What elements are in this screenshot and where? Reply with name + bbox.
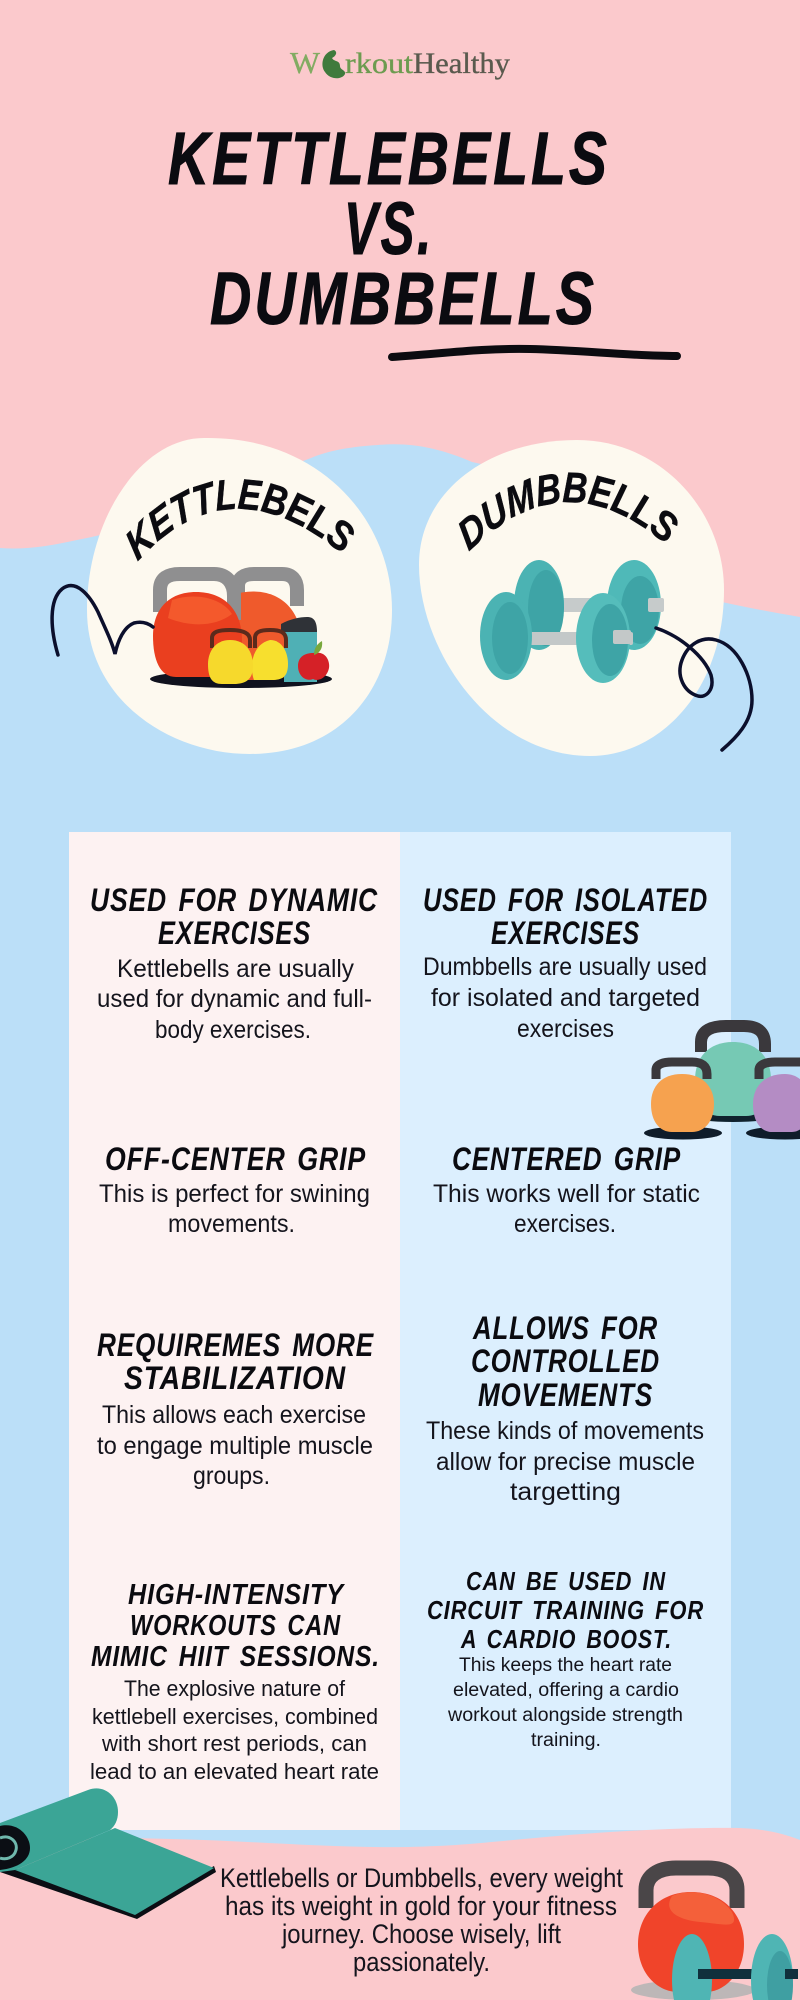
heading: EXERCISES [491,915,640,951]
squiggle: right [656,628,752,750]
body text [447,1655,683,1751]
body text: allow for precise muscle [436,1448,695,1476]
body text [426,1417,704,1506]
body text [97,955,372,1044]
curved label: KETTLEBELS [126,479,354,562]
body text: This is perfect for swining [99,1180,370,1208]
heading: CAN BE USED IN [466,1566,666,1596]
icon: rolled yoga mat [0,1788,216,1919]
logo: Healthy [413,47,510,80]
logo: W [290,45,321,80]
heading: CONTROLLED [471,1343,660,1379]
heading [423,882,708,951]
back dumbbell [543,598,663,612]
heading: USED FOR ISOLATED [423,882,708,918]
curved label: DUMBBELLS [458,472,678,552]
body text: targetting [510,1478,621,1506]
kettlebells point 3 [97,1327,375,1490]
heading: CENTERED GRIP [452,1141,681,1177]
closing message: Kettlebells or Dumbbells, every weight [220,1863,623,1893]
background: top pink wave [0,0,800,617]
body text: used for dynamic and full- [97,985,372,1013]
closing message: passionately. [353,1947,490,1977]
body text: exercises. [514,1210,616,1238]
panel: kettlebells column [69,832,400,1830]
title: VS. [344,187,434,270]
apple [298,653,329,680]
squiggle: left [52,586,153,655]
panel: dumbbells column [400,832,731,1830]
kettlebells point 2 [99,1141,370,1238]
front dumbbell [511,632,633,645]
body text: with short rest periods, can [101,1731,367,1756]
closing message: has its weight in gold for your fitness [225,1891,617,1921]
body text: This works well for static [433,1180,700,1208]
dumbbells point 4 [427,1566,704,1751]
dumbbells point 2 [433,1141,700,1238]
heading: EXERCISES [158,915,311,951]
body text: kettlebell exercises, combined [92,1704,378,1729]
body text: groups. [193,1462,270,1490]
body text: workout alongside strength [447,1705,683,1726]
closing message [220,1863,623,1977]
icon: dumbbell pair [480,560,664,683]
title: KETTLEBELLS [168,117,610,200]
heading: MOVEMENTS [478,1377,653,1413]
logo [290,45,510,80]
heading [97,1327,375,1396]
body text: for isolated and targeted [431,984,700,1012]
panel: kettlebells badge [87,438,392,754]
heading: REQUIREMES MORE [97,1327,375,1363]
body text: training. [531,1730,601,1751]
dumbbells point 1 [423,882,708,1043]
title [168,117,610,340]
body text [90,1676,379,1784]
purple kettlebell [746,1062,800,1140]
title underline [392,349,677,357]
heading: USED FOR DYNAMIC [90,882,378,918]
heading: OFF-CENTER GRIP [105,1141,366,1177]
heading: A CARDIO BOOST. [460,1624,672,1654]
heading: ALLOWS FOR [472,1310,658,1346]
kettlebells point 4 [90,1579,380,1784]
body text: to engage multiple muscle [97,1432,373,1460]
badge blob [87,438,392,754]
badge blob [419,440,724,756]
heading: MIMIC HIIT SESSIONS. [91,1641,380,1673]
body text: body exercises. [155,1016,311,1044]
body text [97,1401,373,1490]
title: DUMBBELLS [210,257,597,340]
closing message: journey. Choose wisely, lift [281,1919,561,1949]
kettlebells point 1 [90,882,378,1044]
body text: The explosive nature of [124,1676,346,1701]
body text [423,953,707,1043]
heading: WORKOUTS CAN [130,1610,341,1642]
icon: kettlebell group [150,574,332,688]
body text: exercises [517,1015,614,1043]
panel: dumbbells badge [419,440,724,756]
dumbbells point 3 [426,1310,704,1506]
shaker bottle [284,630,317,682]
body text: These kinds of movements [426,1417,704,1445]
yellow kettlebells [255,630,286,648]
heading: STABILIZATION [124,1360,346,1396]
heading [90,882,378,951]
logo: rkout [345,47,414,80]
heading [427,1566,704,1654]
heading: HIGH-INTENSITY [128,1579,345,1611]
teal kettlebell [693,1026,773,1122]
body text [433,1180,700,1238]
body text: Dumbbells are usually used [423,953,707,981]
icon: logo leaf [322,50,345,78]
background: bottom pink wave [0,1828,800,2000]
body text: This allows each exercise [102,1401,366,1429]
body text: This keeps the heart rate [459,1655,672,1676]
body text: elevated, offering a cardio [453,1680,679,1701]
heading [91,1579,380,1673]
orange kettlebell [644,1062,722,1140]
heading [471,1310,660,1413]
icon: kettlebell and dumbbell [631,1868,798,2000]
body text: lead to an elevated heart rate [90,1759,379,1784]
body text: movements. [168,1210,295,1238]
body text [99,1180,370,1238]
body text: Kettlebells are usually [117,955,354,983]
heading: CIRCUIT TRAINING FOR [427,1595,704,1625]
icon: coloured kettlebells [644,1026,800,1140]
